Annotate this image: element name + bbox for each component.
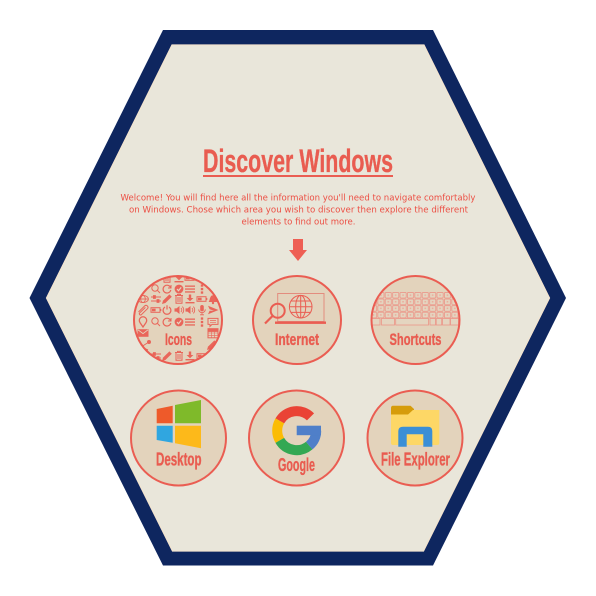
arrow pointing down (289, 239, 307, 261)
icon: Windows logo (157, 400, 201, 448)
intro text: on Windows. Chose which area you wish to discover then explore the different (129, 206, 468, 216)
icon: folder (391, 406, 439, 447)
icon: Google G logo (277, 411, 321, 450)
label: Icons: Icons (165, 330, 192, 349)
intro text (120, 194, 476, 228)
button: Internet (253, 276, 341, 364)
button: Icons (134, 273, 222, 364)
label: Shortcuts: Shortcuts (390, 330, 442, 349)
label: File Explorer: File Explorer (381, 450, 450, 470)
intro text: Welcome! You will find here all the information you'll need to navigate comfortably (120, 194, 476, 204)
button: Google (249, 390, 344, 486)
label: Internet: Internet (275, 330, 319, 349)
icon pattern (138, 273, 218, 361)
icon: keyboard (370, 292, 462, 325)
button: File Explorer (368, 390, 462, 486)
button: Desktop (131, 390, 226, 486)
intro text: elements to find out more. (242, 218, 356, 228)
label: Desktop: Desktop (156, 450, 202, 470)
button: Shortcuts (370, 276, 462, 364)
icon: laptop, globe and magnifier (265, 294, 326, 324)
label: Google: Google (278, 455, 315, 475)
title: Discover Windows (203, 143, 393, 179)
